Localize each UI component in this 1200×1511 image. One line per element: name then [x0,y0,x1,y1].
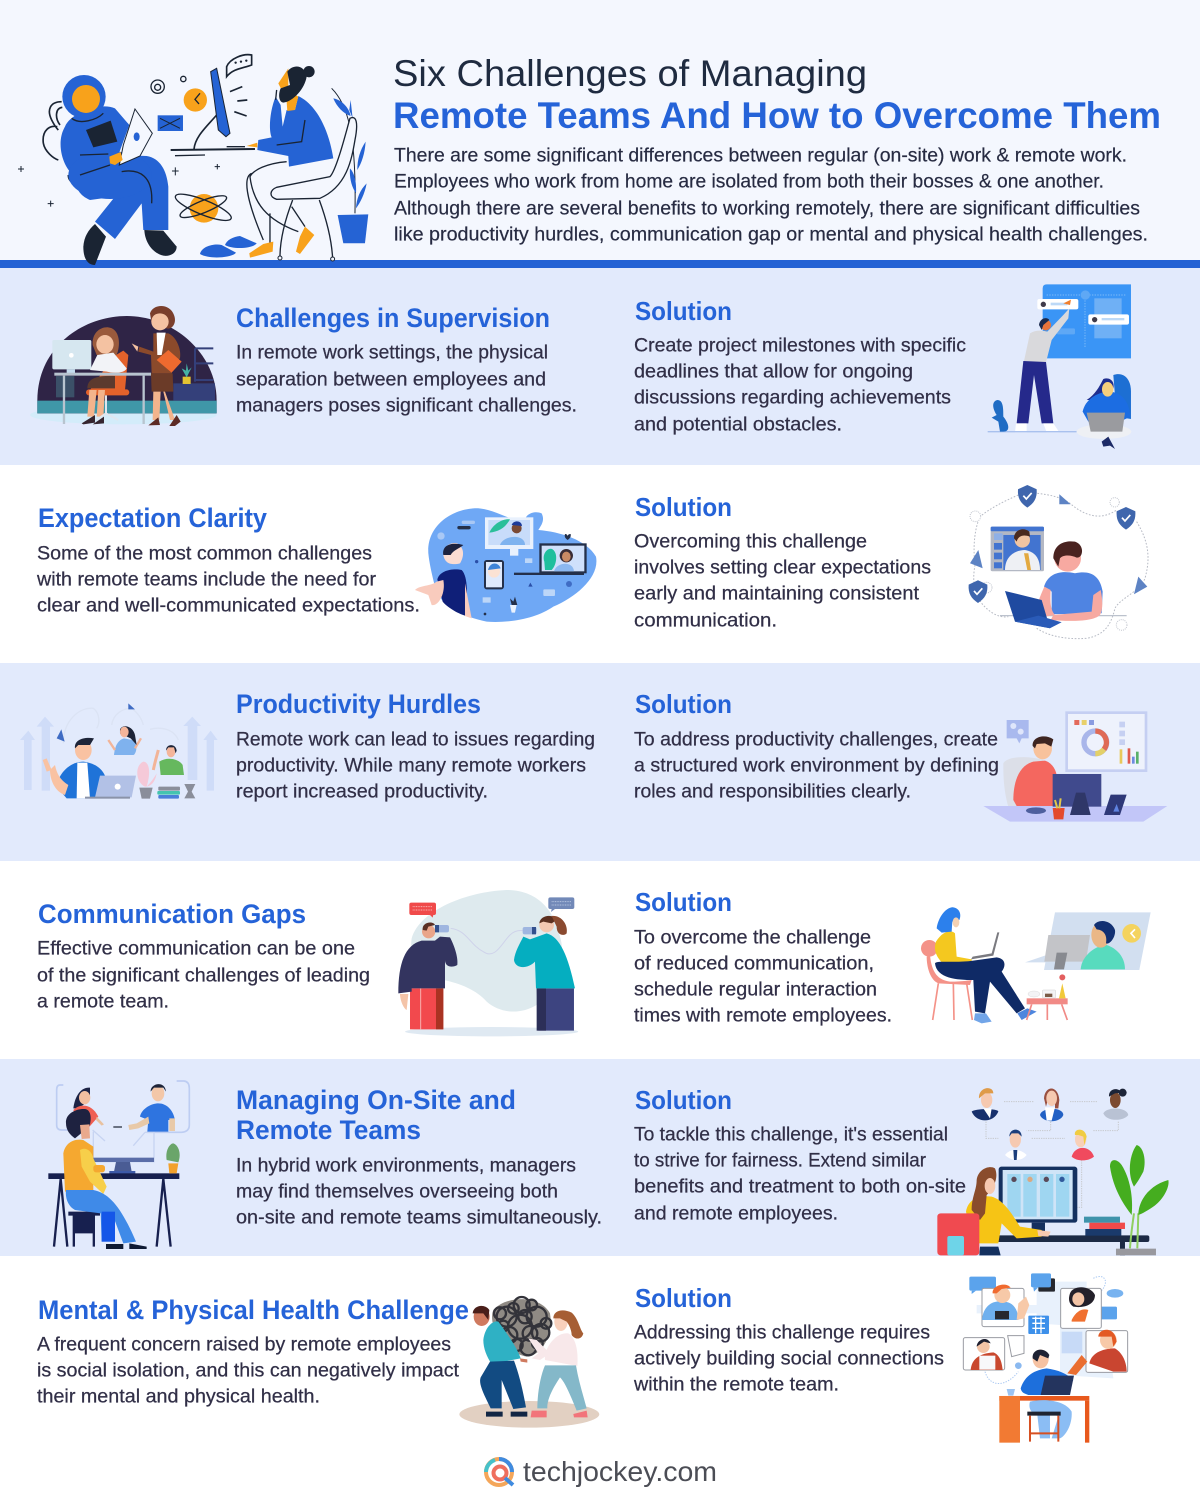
challenge text [37,1334,460,1408]
solution text: communication. [634,610,777,632]
panel: communication gaps [37,887,1151,1036]
solution text [633,1322,944,1396]
solution text: benefits and treatment to both on-site [634,1176,966,1198]
illustration: woman on a video call [921,907,1151,1023]
challenge text: managers poses significant challenges. [236,395,577,417]
challenge text: is social isolation, and this can negatively impact [37,1360,460,1382]
solution text: To overcome the challenge [634,927,871,949]
illustration: man on laptop with video window and shields [969,485,1148,639]
solution text: times with remote employees. [634,1005,892,1027]
challenge text: In hybrid work environments, managers [236,1155,576,1177]
illustration: remote team video collaboration [20,703,218,799]
solution text: deadlines that allow for ongoing [634,361,913,383]
solution heading: Solution [635,1283,732,1313]
solution text [634,729,999,803]
challenge text [37,938,370,1013]
heading: challenges in supervision: Challenges in Supervision [236,303,550,333]
illustration: man at project board and woman with laptop [988,284,1131,449]
illustration: two people carrying a tangled ball [459,1297,599,1428]
heading: managing on-site and remote teams [236,1085,516,1145]
solution text: of reduced communication, [634,953,874,975]
illustration: man at desk with dashboard [983,713,1167,822]
challenge text: A frequent concern raised by remote employees [37,1334,451,1356]
solution heading: Solution [635,887,732,917]
solution text: To tackle this challenge, it's essential [634,1124,948,1146]
challenge text: a remote team. [37,991,169,1013]
solution text [634,335,966,436]
illustration: man at desk in video meetings with coworkers [963,1273,1128,1443]
solution text [634,927,892,1027]
solution text: to strive for fairness. Extend similar [634,1150,926,1172]
solution text: within the remote team. [633,1374,839,1396]
panel: productivity hurdles [0,663,1200,861]
challenge text [36,543,420,617]
solution text: involves setting clear expectations [634,557,931,579]
panel: header [0,0,1200,268]
intro paragraph: There are some significant differences between regular (on-site) work & remote work. [394,145,1127,167]
solution heading: Solution [635,492,732,522]
panel: expectation clarity [36,485,1148,639]
challenge text [236,342,577,417]
solution text: discussions regarding achievements [634,387,951,409]
intro paragraph: Employees who work from home are isolated from both their bosses & one another. [394,171,1104,193]
illustration: man at desk with on-screen colleagues [48,1081,189,1249]
solution text [634,1124,966,1225]
solution text: Create project milestones with specific [634,335,966,357]
heading: managing on-site and remote teams: Remote Teams [236,1115,421,1145]
panel: challenges in supervision [0,268,1200,465]
solution text: and remote employees. [634,1203,838,1225]
solution text: roles and responsibilities clearly. [634,781,911,803]
solution text: actively building social connections [634,1348,944,1370]
heading: managing on-site and remote teams: Managing On-Site and [236,1085,516,1115]
heading: communication gaps: Communication Gaps [38,899,306,929]
solution text: Addressing this challenge requires [634,1322,930,1344]
challenge text: clear and well-communicated expectations. [37,595,420,617]
challenge text: Some of the most common challenges [37,543,372,565]
illustration: astronaut and man working at a desk [18,55,368,265]
challenge text: on-site and remote teams simultaneously. [236,1207,602,1229]
challenge text: may find themselves overseeing both [236,1181,558,1203]
panel: mental and physical health challenge [37,1273,1128,1443]
solution heading: Solution [635,296,732,326]
challenge text: with remote teams include the need for [36,569,377,591]
solution text: early and maintaining consistent [634,583,920,605]
solution text: and potential obstacles. [634,414,842,436]
challenge text [236,1155,602,1229]
challenge text: Effective communication can be one [37,938,355,960]
challenge text: of the significant challenges of leading [37,965,370,987]
challenge text: productivity. While many remote workers [236,755,586,777]
challenge text [236,729,595,803]
challenge text: report increased productivity. [236,781,488,803]
solution text [634,531,931,632]
solution heading: Solution [635,1085,732,1115]
challenge text: their mental and physical health. [37,1386,320,1408]
challenge text: In remote work settings, the physical [236,342,548,364]
solution text: a structured work environment by defining [634,755,999,777]
title line two: Remote Teams And How to Overcome Them [393,95,1161,136]
solution heading: Solution [635,689,732,719]
heading: mental and physical health challenge: Mental & Physical Health Challenge [38,1295,469,1325]
solution text: schedule regular interaction [634,979,877,1001]
title line one: Six Challenges of Managing [393,53,867,94]
illustration: woman at computer with org chart and plant [937,1088,1169,1255]
illustration: manager and employee at a desk [30,306,217,426]
intro paragraph [394,145,1148,246]
illustration: woman on video calls [415,508,596,622]
heading: expectation clarity: Expectation Clarity [38,503,267,533]
solution text: Overcoming this challenge [634,531,867,553]
intro paragraph: Although there are several benefits to working remotely, there are significant difficulties [394,198,1140,220]
icon: techjockey logo [486,1459,513,1485]
solution text: To address productivity challenges, create [634,729,998,751]
challenge text: separation between employees and [236,369,546,391]
footer: techjockey logo and website [486,1456,717,1487]
website name: techjockey.com [523,1456,717,1487]
heading: productivity hurdles: Productivity Hurdles [236,689,481,719]
challenge text: Remote work can lead to issues regarding [236,729,595,751]
intro paragraph: like productivity hurdles, communication gap or mental and physical health challenges. [394,224,1148,246]
panel: managing on-site and remote teams [0,1059,1200,1256]
illustration: two people talking through tin cans [398,890,578,1036]
